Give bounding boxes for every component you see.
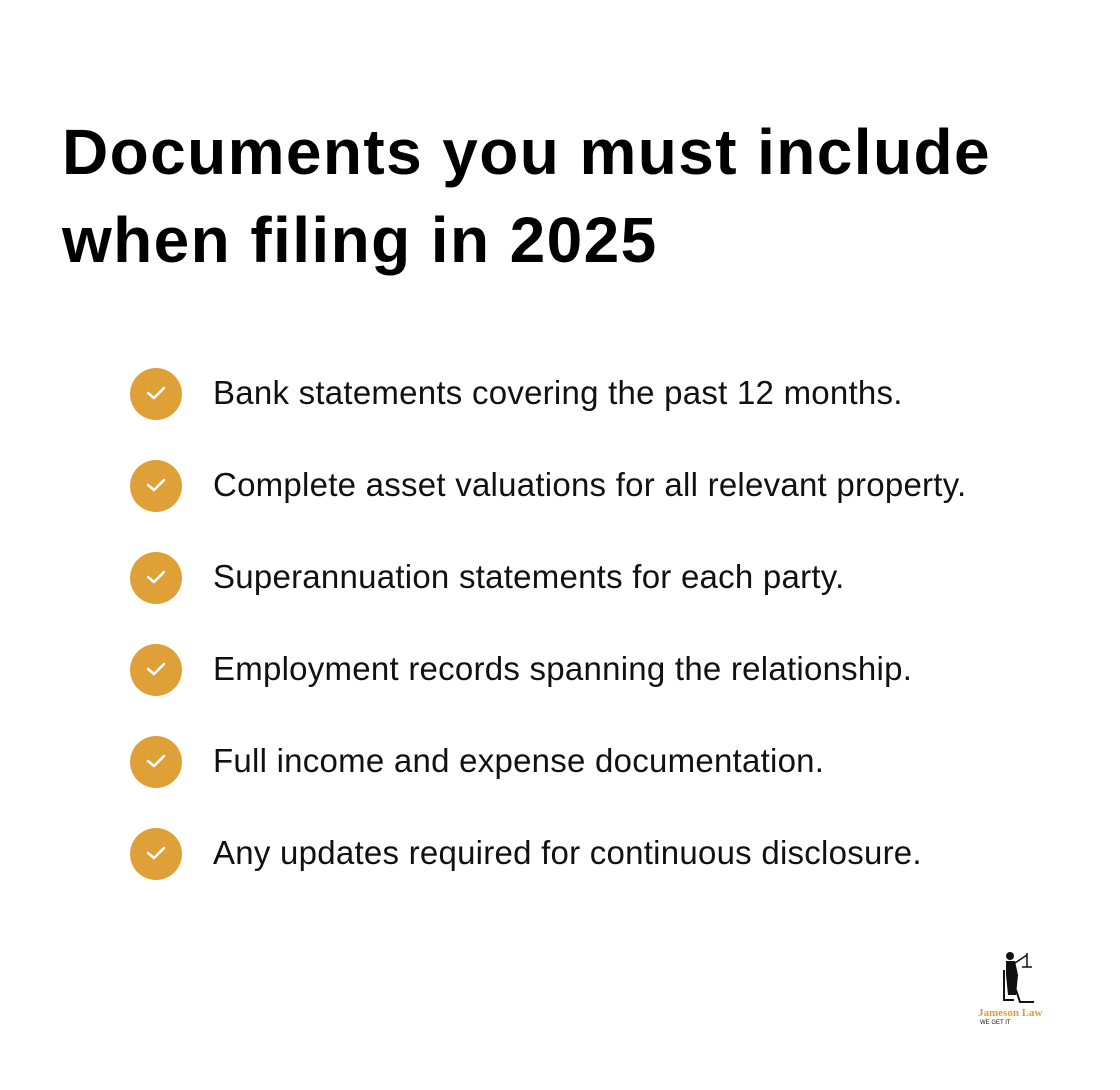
text: Superannuation statements for each party. — [213, 558, 845, 595]
title: Documents you must include — [62, 116, 991, 188]
text: Complete asset valuations for all relevant property. — [213, 466, 966, 503]
text: Employment records spanning the relationship. — [213, 650, 912, 687]
item 5 — [130, 736, 824, 788]
icon: check — [130, 828, 182, 880]
title: when filing in 2025 — [62, 204, 658, 276]
icon: check — [130, 552, 182, 604]
icon: check — [130, 368, 182, 420]
title — [62, 116, 991, 276]
icon: check — [130, 736, 182, 788]
item 3 — [130, 552, 845, 604]
icon: check — [130, 460, 182, 512]
icon: check — [130, 644, 182, 696]
logo text: Jameson Law — [978, 1007, 1042, 1019]
text: Bank statements covering the past 12 months. — [213, 374, 903, 411]
item 1 — [130, 368, 903, 420]
item 4 — [130, 644, 912, 696]
text: Any updates required for continuous disclosure. — [213, 834, 922, 871]
item 6 — [130, 828, 922, 880]
text: Full income and expense documentation. — [213, 742, 824, 779]
logo — [978, 952, 1042, 1026]
item 2 — [130, 460, 966, 512]
icon: justice figure — [1003, 952, 1034, 1003]
logo: WE GET IT — [980, 1020, 1011, 1026]
